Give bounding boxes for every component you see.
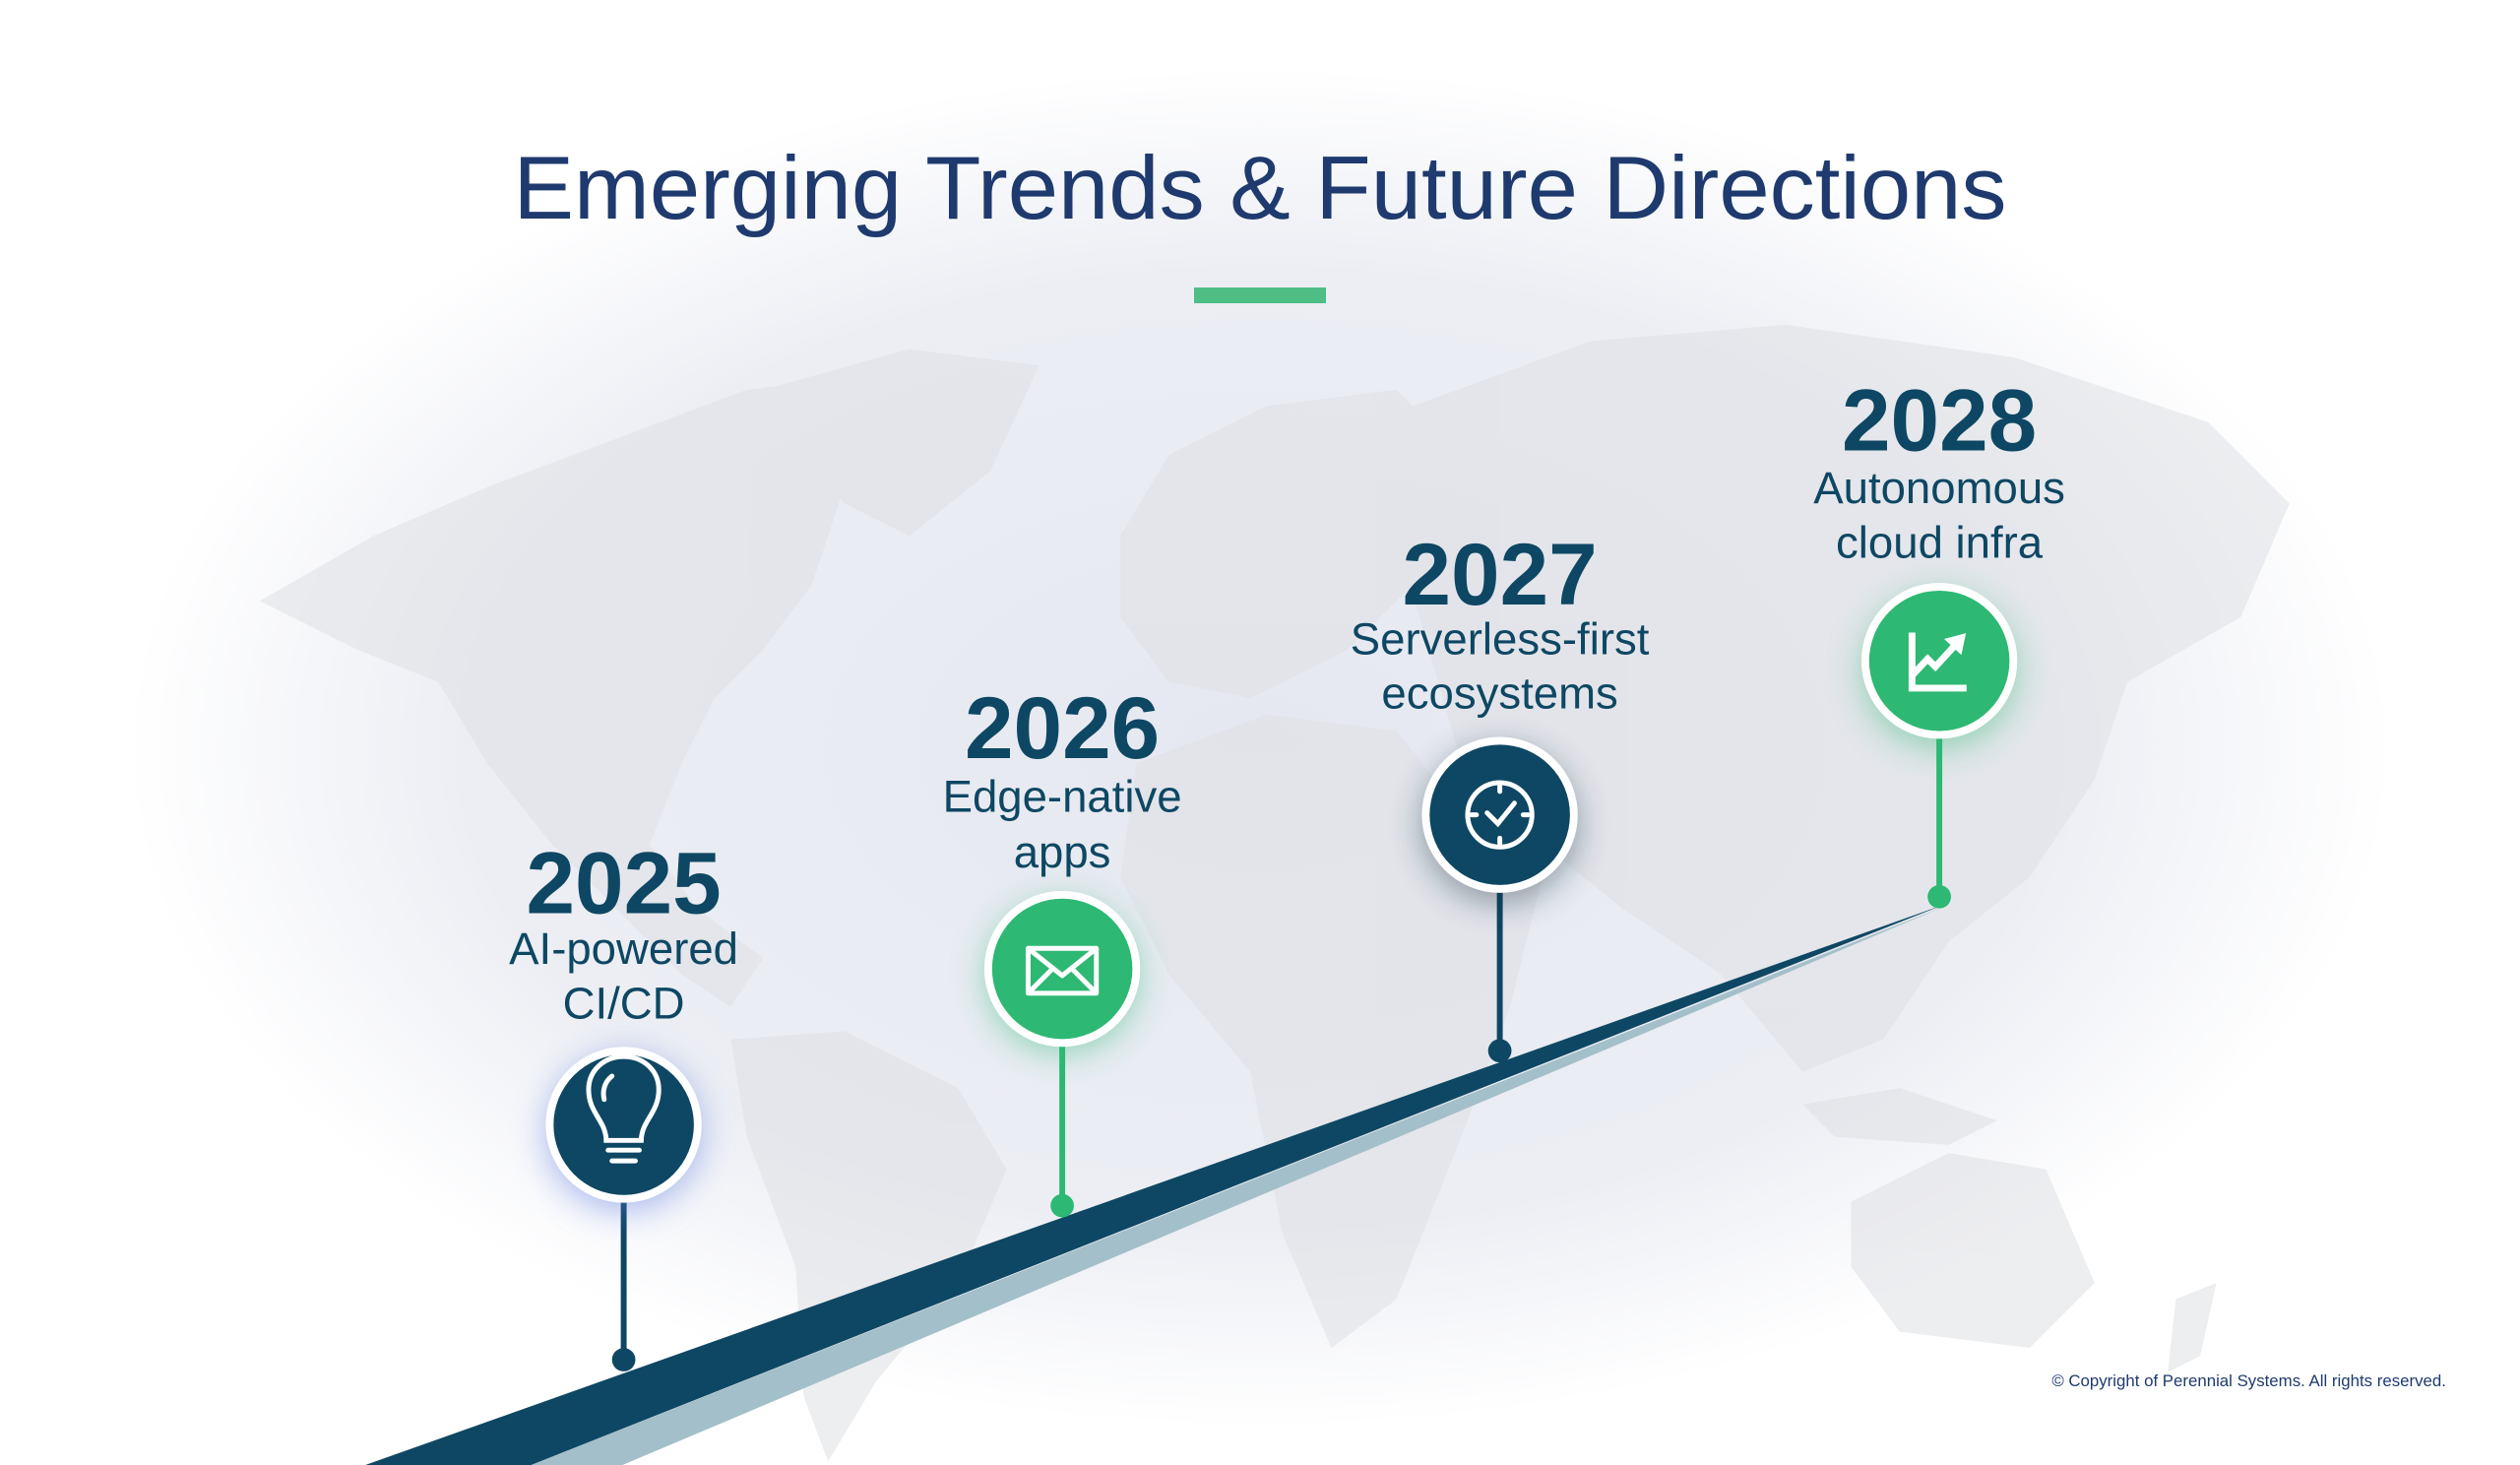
milestone 2027: 2027 (1403, 525, 1598, 623)
timeline ribbon (291, 905, 1944, 1465)
icon: clock (1468, 783, 1532, 847)
milestone 2028 (1813, 370, 2065, 909)
milestone 2025: 2025 (526, 834, 722, 932)
milestone 2026: 2026 (965, 678, 1160, 777)
milestone 2028: cloud infra (1836, 517, 2044, 567)
icon: growth chart (1912, 633, 1967, 688)
milestone 2027 (1351, 525, 1650, 1062)
milestone 2026 (943, 678, 1182, 1218)
milestone 2025: AI-powered (509, 924, 738, 974)
world map background (260, 325, 2290, 1462)
milestone 2026: Edge-native (943, 772, 1182, 822)
milestone 2028: Autonomous (1813, 463, 2065, 513)
milestone 2027: Serverless-first (1351, 613, 1650, 664)
milestone 2028: 2028 (1842, 370, 2037, 469)
copyright: © Copyright of Perennial Systems. All rights reserved. (2051, 1371, 2446, 1390)
milestone 2025: CI/CD (563, 979, 685, 1029)
milestone 2027: ecosystems (1381, 669, 1618, 719)
icon: lightbulb (589, 1056, 659, 1161)
title: Emerging Trends & Future Directions (514, 139, 2006, 238)
milestone 2025 (509, 834, 738, 1371)
title underline (1194, 287, 1326, 303)
timeline content (291, 370, 2446, 1465)
icon: envelope (1028, 948, 1097, 993)
milestone 2026: apps (1014, 827, 1110, 877)
